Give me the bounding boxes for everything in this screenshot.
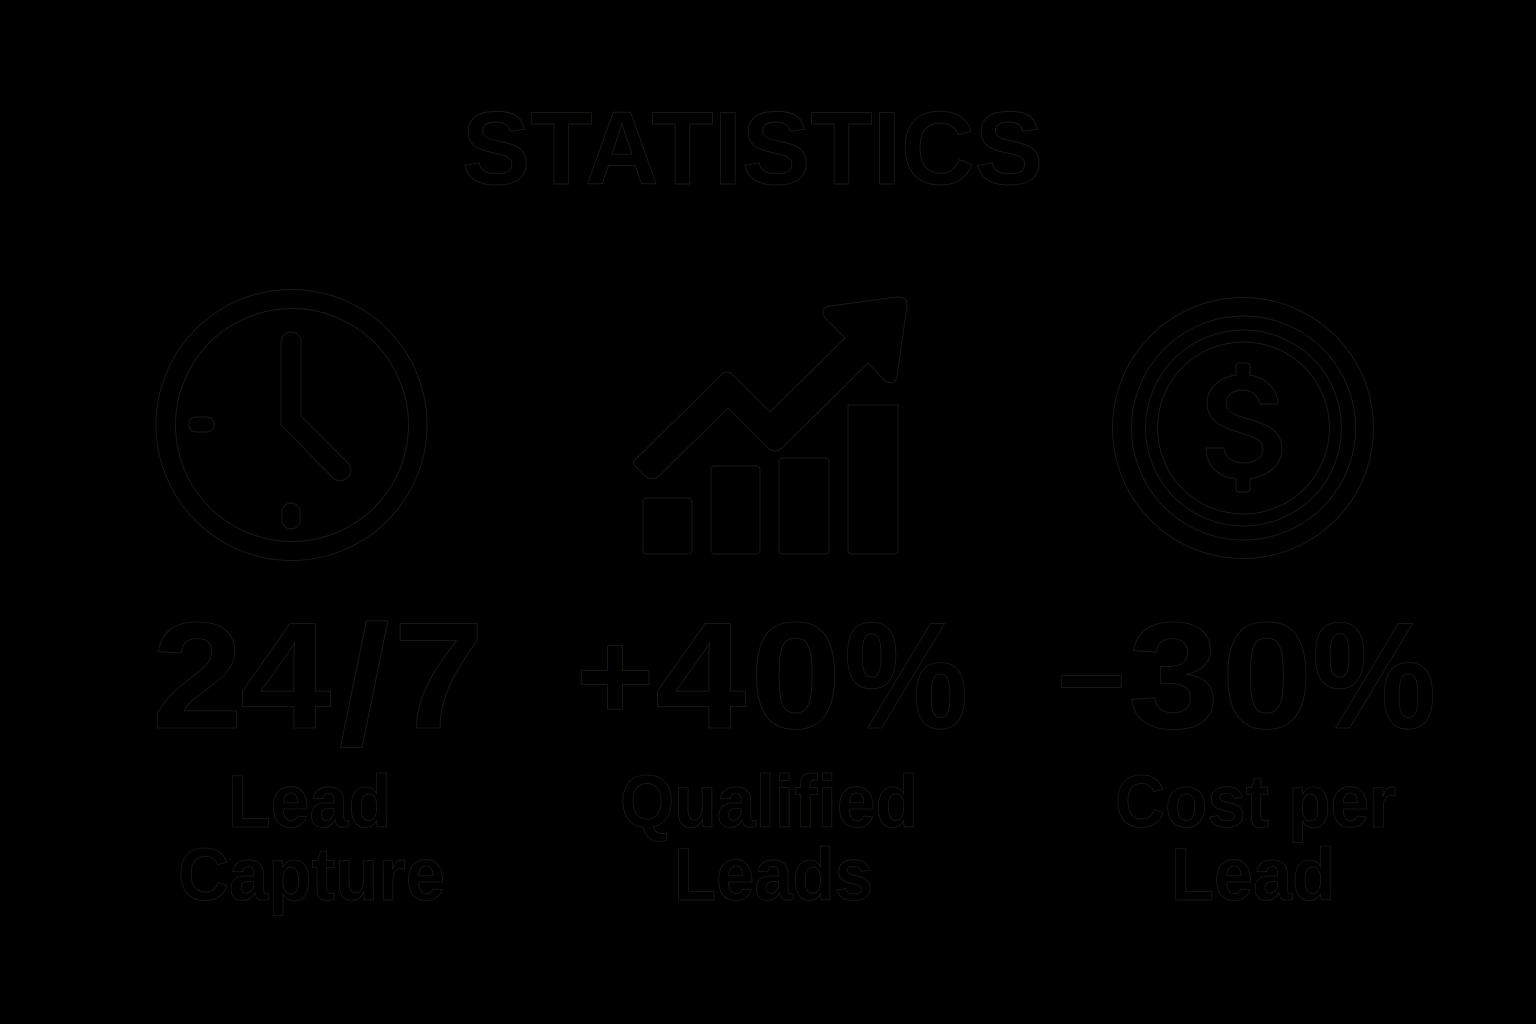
stat: 24/7: 2 — [152, 591, 243, 761]
stat: −30%: % — [1312, 591, 1436, 760]
label: cost per lead: Cost per — [1115, 760, 1396, 843]
stat: 24/7: / — [339, 591, 390, 781]
label: qualified leads — [620, 760, 918, 916]
stat: +40%: + — [576, 606, 654, 746]
icon: clock — [156, 290, 427, 560]
stat: +40%: % — [844, 591, 968, 760]
stat: −30% — [1057, 591, 1436, 761]
panel: qualified leads — [576, 297, 968, 916]
icon: dollar coin — [1112, 298, 1374, 558]
stat: 24/7: 4 — [240, 591, 331, 761]
title: STATISTICS — [462, 91, 1043, 207]
icon: rising bar chart with arrow — [634, 297, 907, 554]
stat: 24/7: 7 — [393, 591, 484, 761]
stat: +40% — [576, 591, 968, 761]
stat: +40%: 0 — [750, 591, 841, 761]
panel: cost per lead — [1057, 298, 1436, 916]
label: cost per lead — [1115, 760, 1396, 916]
stat: +40%: 4 — [655, 591, 746, 761]
label: qualified leads: Qualified — [620, 760, 918, 843]
label: cost per lead: Lead — [1171, 833, 1335, 916]
stat: −30%: 0 — [1221, 591, 1313, 761]
label: qualified leads: Leads — [674, 833, 873, 916]
label: lead capture: Capture — [178, 833, 445, 916]
stat: −30%: 3 — [1128, 591, 1219, 761]
label: lead capture — [178, 760, 445, 916]
stat: −30%: − — [1057, 619, 1126, 742]
label: lead capture: Lead — [228, 760, 391, 843]
panel: lead capture — [152, 290, 484, 916]
